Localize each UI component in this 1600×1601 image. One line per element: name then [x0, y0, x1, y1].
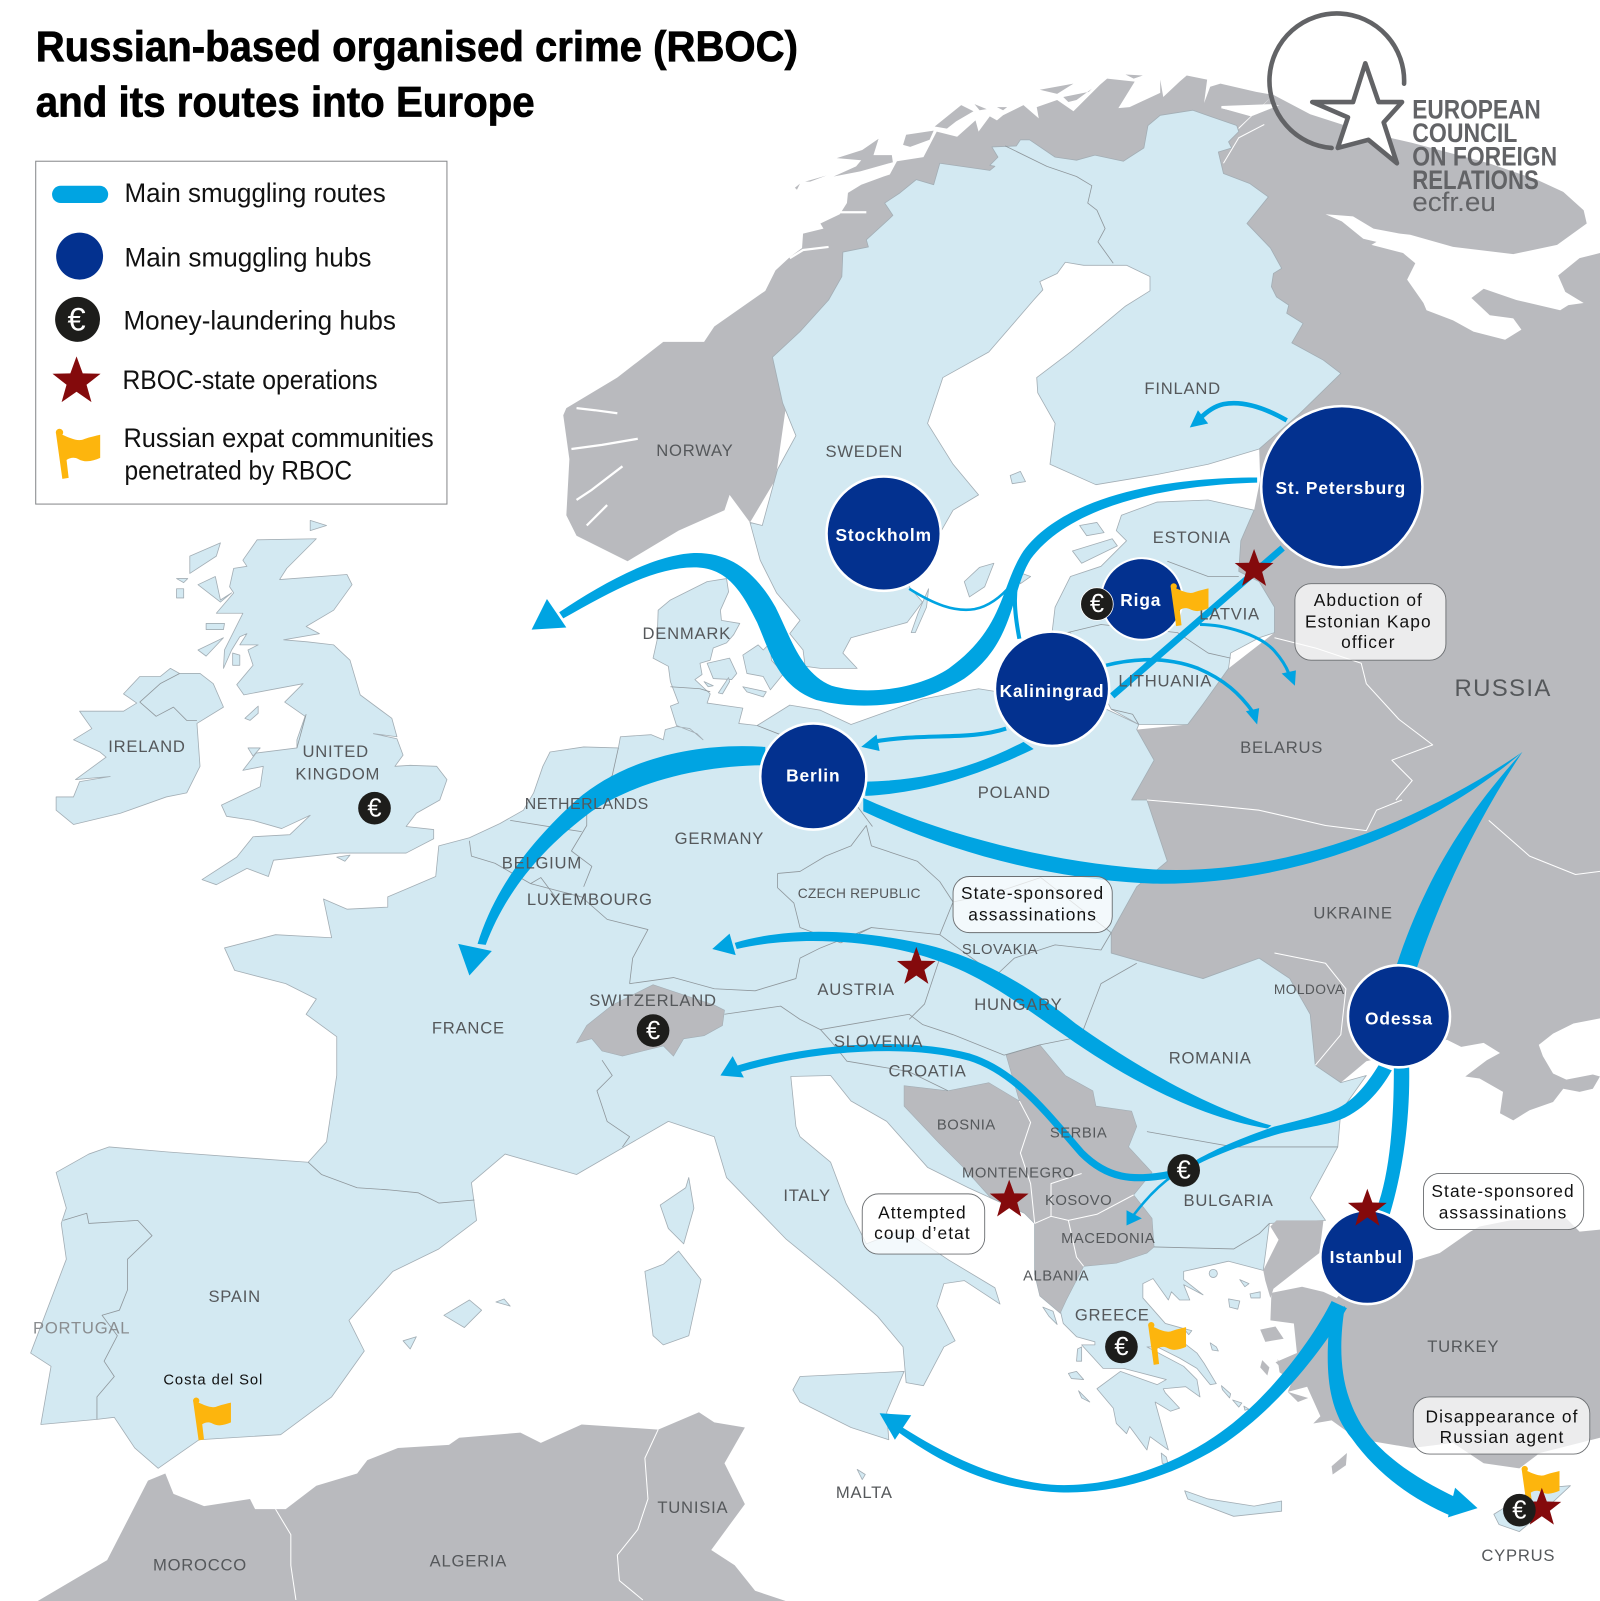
label: Norway: NORWAY: [656, 441, 734, 460]
label: Algeria: ALGERIA: [430, 1551, 507, 1570]
label: Slovenia: SLOVENIA: [834, 1032, 923, 1051]
callout: Attempted coup d'etat: [862, 1194, 985, 1254]
route: Romania through Hungary to Germany: [735, 932, 1271, 1129]
flag: Greece: [1148, 1322, 1186, 1365]
euro: Bulgaria: [1167, 1154, 1200, 1187]
callout: State-sponsored assassinations (Turkey): [1423, 1173, 1584, 1230]
callout: State-sponsored assassinations (Slovakia): State-sponsored: [961, 883, 1104, 903]
callout: Abduction of Estonian Kapo officer: officer: [1341, 632, 1396, 652]
star: Austria: [897, 947, 936, 984]
callout: Attempted coup d'etat: coup d’etat: [874, 1223, 971, 1243]
route: Kaliningrad to the Baltic trunk: [1015, 563, 1020, 639]
arrow: Finland: [1190, 410, 1208, 428]
label: France: FRANCE: [432, 1019, 505, 1038]
hub: Berlin: Berlin: [786, 766, 840, 786]
label: Russia: RUSSIA: [1454, 675, 1552, 702]
logo text: [1412, 94, 1557, 217]
flag: Costa del Sol: [193, 1398, 231, 1440]
route: Istanbul to Cyprus: [1328, 1306, 1457, 1516]
legend text: money-laundering: Money-laundering hubs: [123, 306, 396, 336]
label: Costa del Sol: Costa del Sol: [163, 1373, 263, 1389]
label: Denmark: DENMARK: [642, 624, 731, 643]
arrow: Sicily: [880, 1413, 911, 1440]
label: Netherlands: NETHERLANDS: [525, 796, 649, 813]
euro: Switzerland: [637, 1014, 669, 1047]
legend text: hubs: Main smuggling hubs: [124, 242, 371, 272]
legend icon: money-laundering hub: €: [67, 301, 86, 338]
label: Slovakia: SLOVAKIA: [962, 942, 1038, 958]
route: Latvia branch to Russia: [1200, 624, 1289, 673]
star: Istanbul: [1348, 1189, 1387, 1226]
land: United Kingdom: [202, 539, 447, 885]
callout: State-sponsored assassinations (Slovakia): [953, 877, 1112, 933]
arrow: Belarus: [1246, 708, 1259, 724]
arrow: Macedonia: [1127, 1210, 1142, 1225]
legend text: expat communities: penetrated by RBOC: [124, 456, 352, 486]
star: Montenegro: [990, 1180, 1029, 1217]
arrow: North Sea: [532, 599, 566, 630]
euro: Cyprus: [1503, 1494, 1536, 1527]
label: Czech Republic: CZECH REPUBLIC: [798, 886, 921, 901]
route: Odessa to Russia: [1396, 752, 1522, 969]
legend text: state operations: RBOC-state operations: [122, 365, 378, 395]
logo text: RELATIONS: [1412, 165, 1539, 195]
land: Norway (grey): [563, 76, 1273, 561]
land: Baltic states: [1052, 500, 1274, 724]
label: Sweden: SWEDEN: [826, 442, 903, 461]
expat flags: [193, 583, 1560, 1509]
label: Kosovo: KOSOVO: [1045, 1193, 1112, 1209]
label: Germany: GERMANY: [675, 829, 764, 848]
label: Luxembourg: LUXEMBOURG: [527, 890, 653, 909]
route: Bulgaria through Croatia to Italy: [737, 1048, 1169, 1178]
legend icon: star: [52, 356, 101, 402]
land: European Turkey (grey): [1263, 1220, 1323, 1298]
callout: State-sponsored assassinations (Slovakia): assassinations: [968, 904, 1097, 924]
star: Estonia border: [1235, 549, 1273, 586]
flag: Riga: [1171, 583, 1208, 626]
euro: Cyprus: €: [1512, 1496, 1526, 1524]
label: United Kingdom: KINGDOM: [295, 765, 380, 784]
route: St Petersburg around Denmark to the North Sea: [559, 478, 1257, 706]
label: Poland: POLAND: [978, 783, 1051, 802]
legend icon: hub: [56, 233, 103, 280]
label: Serbia: SERBIA: [1050, 1126, 1107, 1142]
smuggling hubs: [760, 406, 1450, 1304]
label: Finland: FINLAND: [1144, 379, 1221, 398]
logo text: EUROPEAN: [1412, 94, 1541, 124]
euro: Riga: [1081, 588, 1113, 620]
hub: Istanbul: Istanbul: [1330, 1247, 1403, 1267]
legend icon: money-laundering hub: [55, 297, 100, 342]
land: Ireland: [56, 668, 223, 824]
land: Sweden and Finland: [750, 110, 1341, 668]
hub: Odessa: Odessa: [1365, 1008, 1433, 1028]
callout: Disappearance of Russian agent: Russian agent: [1440, 1427, 1564, 1447]
star: Cyprus: [1522, 1488, 1561, 1525]
label: Morocco: MOROCCO: [153, 1555, 247, 1574]
legend text: expat communities: Russian expat communities: [123, 423, 434, 453]
logo icon: circle and star: [1269, 13, 1404, 163]
label: Portugal: PORTUGAL: [33, 1319, 130, 1338]
hub: Kaliningrad: [995, 632, 1109, 746]
arrow: Italy: [720, 1056, 744, 1078]
route: St Petersburg to Kaliningrad: [1112, 548, 1283, 696]
label: Greece: GREECE: [1075, 1305, 1150, 1324]
label: Estonia: ESTONIA: [1153, 528, 1231, 547]
label: Latvia: LATVIA: [1199, 604, 1260, 623]
route: Kaliningrad to Berlin thick: [865, 742, 1034, 796]
hub: St. Petersburg: [1261, 406, 1422, 567]
arrow: towards Berlin: [861, 735, 880, 751]
label: Tunisia: TUNISIA: [657, 1498, 728, 1517]
callout: State-sponsored assassinations (Turkey): State-sponsored: [1431, 1181, 1575, 1201]
hub: Stockholm: Stockholm: [835, 525, 932, 545]
hub: St. Petersburg: St. Petersburg: [1276, 478, 1406, 498]
land: Mediterranean, Baltic, British and Aegean islands: [177, 471, 1570, 1532]
route: St Petersburg to Finland: [1200, 403, 1287, 420]
arrow: Cyprus: [1448, 1488, 1478, 1517]
callout: Disappearance of Russian agent: Disappearance of: [1426, 1406, 1579, 1426]
routes: main smuggling routes: [458, 403, 1522, 1517]
land: Norwegian coastal islands (grey): [795, 74, 1143, 190]
arrow: Germany: [712, 934, 736, 955]
title: Russian-based organised crime (RBOC): [36, 23, 798, 71]
route: Kaliningrad to Belarus: [1106, 660, 1253, 712]
land: mainland Europe: [31, 579, 1366, 1468]
route: Stockholm to the Baltic trunk: [909, 584, 1012, 610]
euro: United Kingdom: €: [367, 794, 382, 822]
money-laundering hubs: [358, 588, 1200, 1363]
label: Ukraine: UKRAINE: [1313, 903, 1393, 922]
callout: Disappearance of Russian agent: [1413, 1397, 1590, 1454]
arrow: France: [458, 944, 492, 975]
callout: Abduction of Estonian Kapo officer: Estonian Kapo: [1305, 612, 1432, 632]
legend icon: route: [52, 186, 108, 203]
hub: Stockholm: [827, 477, 941, 591]
label: Switzerland: SWITZERLAND: [589, 991, 717, 1010]
legend text: routes: Main smuggling routes: [124, 178, 386, 208]
hub: Istanbul: [1320, 1210, 1414, 1304]
land: Switzerland (grey): [577, 985, 724, 1056]
callout: Abduction of Estonian Kapo officer: [1295, 584, 1446, 660]
label: Albania: ALBANIA: [1023, 1269, 1089, 1285]
route: Bulgaria to Macedonia: [1133, 1174, 1174, 1216]
country labels: [33, 379, 1555, 1574]
callout: Attempted coup d'etat: Attempted: [878, 1202, 967, 1222]
label: Hungary: HUNGARY: [974, 995, 1062, 1014]
label: Lithuania: LITHUANIA: [1118, 672, 1212, 691]
arrow: Latvia branch: [1282, 670, 1296, 686]
label: Macedonia: MACEDONIA: [1061, 1231, 1155, 1247]
hub: Riga: Riga: [1120, 590, 1161, 610]
land: Russia, Belarus and Ukraine (grey): [1111, 95, 1600, 1120]
label: Bosnia: BOSNIA: [937, 1118, 996, 1134]
hub: Kaliningrad: Kaliningrad: [1000, 681, 1104, 701]
label: Bulgaria: BULGARIA: [1183, 1191, 1274, 1210]
logo: European Council on Foreign Relations: [1269, 13, 1557, 217]
euro: Switzerland: €: [646, 1017, 660, 1045]
callout: Abduction of Estonian Kapo officer: Abduction of: [1314, 590, 1423, 610]
logo text: COUNCIL: [1412, 118, 1517, 148]
hub: Odessa: [1348, 965, 1450, 1067]
euro: United Kingdom: [358, 792, 391, 824]
label: Ireland: IRELAND: [108, 737, 186, 756]
label: Romania: ROMANIA: [1169, 1048, 1252, 1067]
euro: Greece: [1105, 1331, 1138, 1363]
euro: Greece: €: [1114, 1333, 1129, 1361]
decorative fjords: [571, 105, 1276, 526]
title: and its routes into Europe: [36, 78, 535, 126]
route: Kaliningrad to Berlin thin arrow: [872, 729, 1006, 742]
logo text: ON FOREIGN: [1412, 141, 1557, 171]
logo text: ecfr.eu: [1412, 187, 1496, 217]
hub: Riga: [1101, 558, 1183, 640]
panel: legend: [36, 161, 447, 504]
legend icon: flag: [56, 429, 100, 479]
route: Odessa to Istanbul: [1377, 1067, 1409, 1214]
euro: Riga: €: [1090, 590, 1104, 618]
title: [36, 23, 798, 126]
route: Berlin to Russia: [863, 752, 1522, 884]
RBOC-state operations stars: [897, 549, 1387, 1226]
label: Montenegro: MONTENEGRO: [962, 1166, 1075, 1182]
label: Croatia: CROATIA: [889, 1062, 967, 1081]
land: Turkey (grey): [1270, 1218, 1600, 1468]
land: Bosnia, Serbia, Montenegro, Kosovo, Macedonia, Albania (grey): [904, 1045, 1154, 1313]
legend text: expat communities: [123, 423, 434, 486]
route: Berlin to France: [478, 746, 765, 945]
label: United Kingdom: UNITED: [302, 742, 369, 761]
label: Cyprus: CYPRUS: [1481, 1546, 1555, 1565]
euro: Bulgaria: €: [1177, 1157, 1191, 1185]
label: Turkey: TURKEY: [1427, 1337, 1499, 1356]
label: Italy: ITALY: [783, 1186, 831, 1205]
route: Odessa to Bulgaria: [1196, 1065, 1392, 1164]
label: Spain: SPAIN: [208, 1287, 261, 1306]
land: Aegean islands (grey): [1260, 1327, 1347, 1474]
label: Moldova: MOLDOVA: [1274, 982, 1345, 997]
route: Istanbul to Sicily: [895, 1301, 1347, 1492]
label: Malta: MALTA: [836, 1483, 893, 1502]
callout: State-sponsored assassinations (Turkey): assassinations: [1439, 1202, 1567, 1222]
land: North Africa (grey): [38, 1412, 786, 1601]
label: Belarus: BELARUS: [1240, 738, 1323, 757]
label: Belgium: BELGIUM: [502, 853, 582, 872]
hub: Berlin: [760, 723, 866, 830]
flag: Cyprus: [1522, 1466, 1560, 1509]
label: Austria: AUSTRIA: [817, 980, 895, 999]
